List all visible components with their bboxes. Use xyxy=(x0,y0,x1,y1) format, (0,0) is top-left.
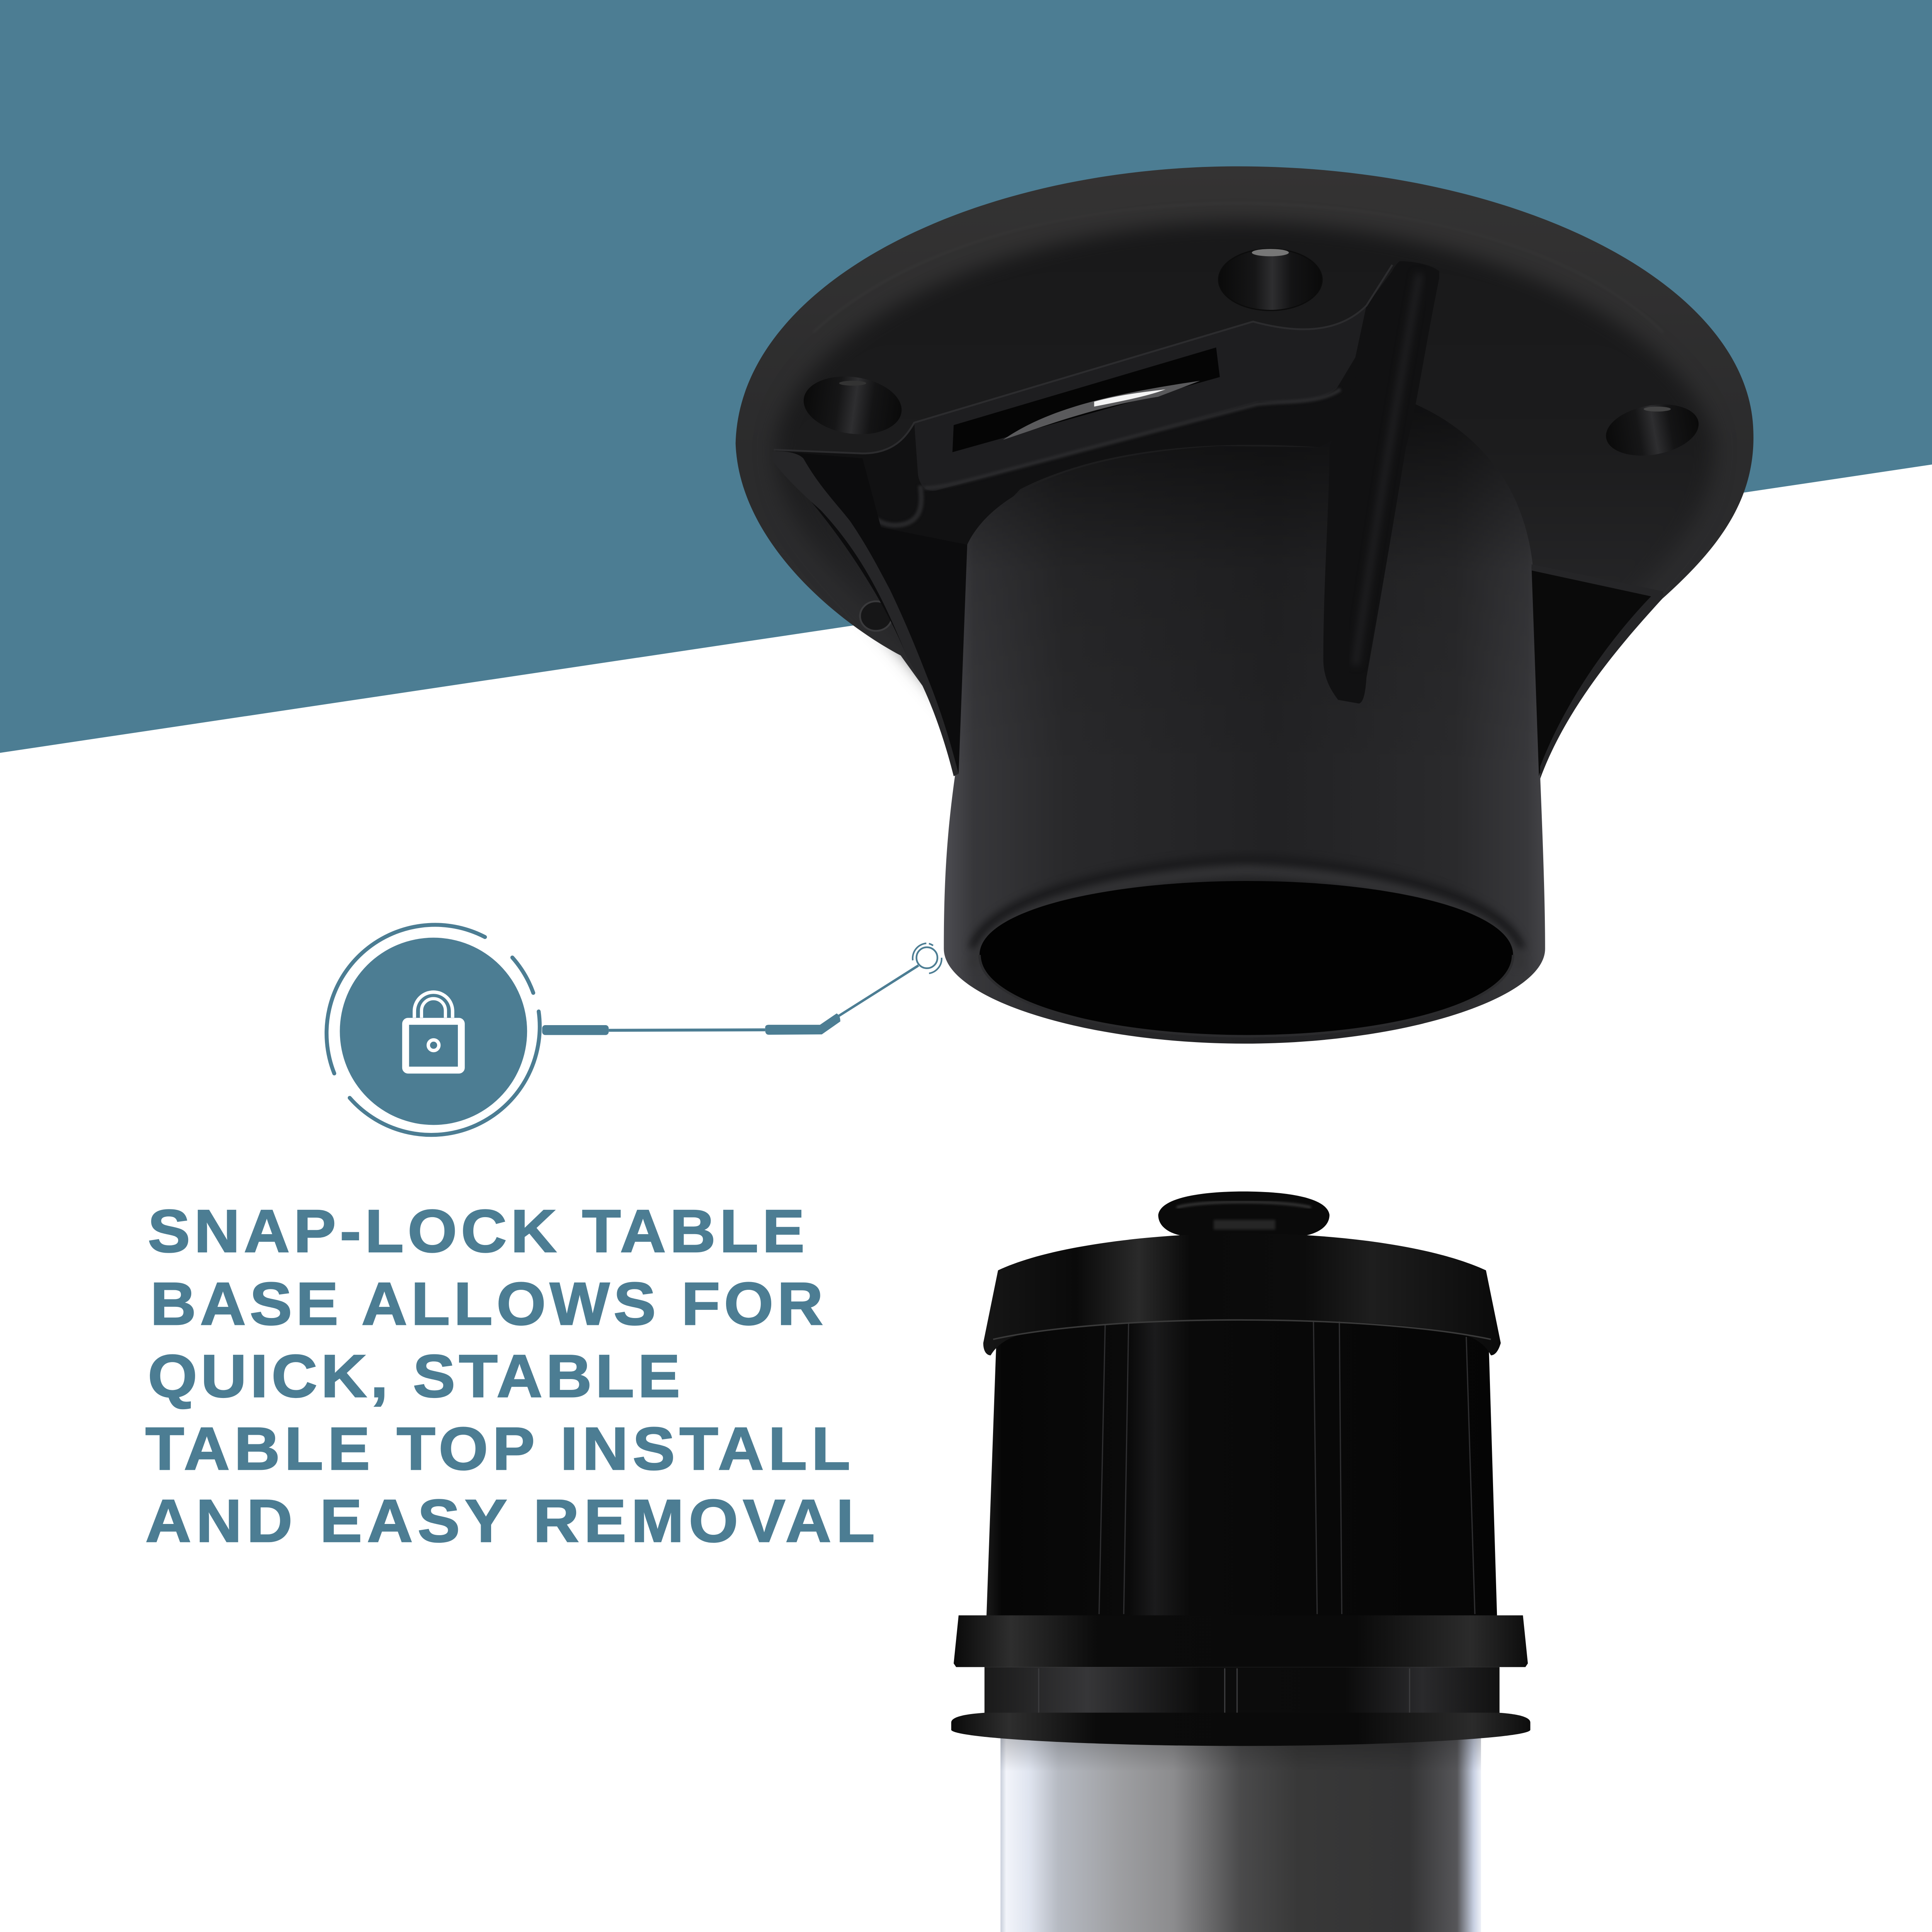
plug body xyxy=(986,1294,1497,1617)
product: lower leg with snap-lock plug xyxy=(951,1192,1530,1932)
callout: lock badge and leader xyxy=(327,925,942,1135)
metal leg tube xyxy=(1000,1731,1481,1932)
slot with silver ball xyxy=(952,347,1220,452)
bar beneath slot xyxy=(914,306,1366,491)
collar ring xyxy=(954,1615,1528,1667)
badge circle xyxy=(340,938,527,1125)
left gusset xyxy=(772,451,967,776)
icon: padlock xyxy=(406,992,461,1070)
teal diagonal panel xyxy=(0,0,1932,753)
heading text: TABLE TOP INSTALL xyxy=(145,1415,850,1482)
base flange ring xyxy=(951,1713,1530,1746)
heading text: QUICK, STABLE xyxy=(148,1342,680,1410)
tube rim shading xyxy=(973,859,1520,949)
heading text: SNAP-LOCK TABLE xyxy=(148,1197,804,1265)
lower band with ribs xyxy=(985,1667,1500,1720)
raised rib on plate xyxy=(774,261,1400,544)
heading text: AND EASY REMOVAL xyxy=(145,1487,875,1554)
plug cap xyxy=(983,1233,1501,1355)
plug knob xyxy=(1158,1192,1330,1237)
badge ring arcs xyxy=(327,925,540,1135)
leader line xyxy=(542,966,918,1035)
socket tube xyxy=(944,402,1545,1044)
socket opening xyxy=(980,881,1513,1036)
leader target ring xyxy=(913,943,942,973)
product: top socket with flange xyxy=(736,166,1753,1044)
heading text xyxy=(145,1197,875,1554)
mounting holes xyxy=(800,249,1703,631)
vertical fin xyxy=(1323,261,1439,704)
heading text: BASE ALLOWS FOR xyxy=(150,1270,823,1337)
flange plate xyxy=(736,166,1753,739)
right gusset xyxy=(1532,564,1663,779)
